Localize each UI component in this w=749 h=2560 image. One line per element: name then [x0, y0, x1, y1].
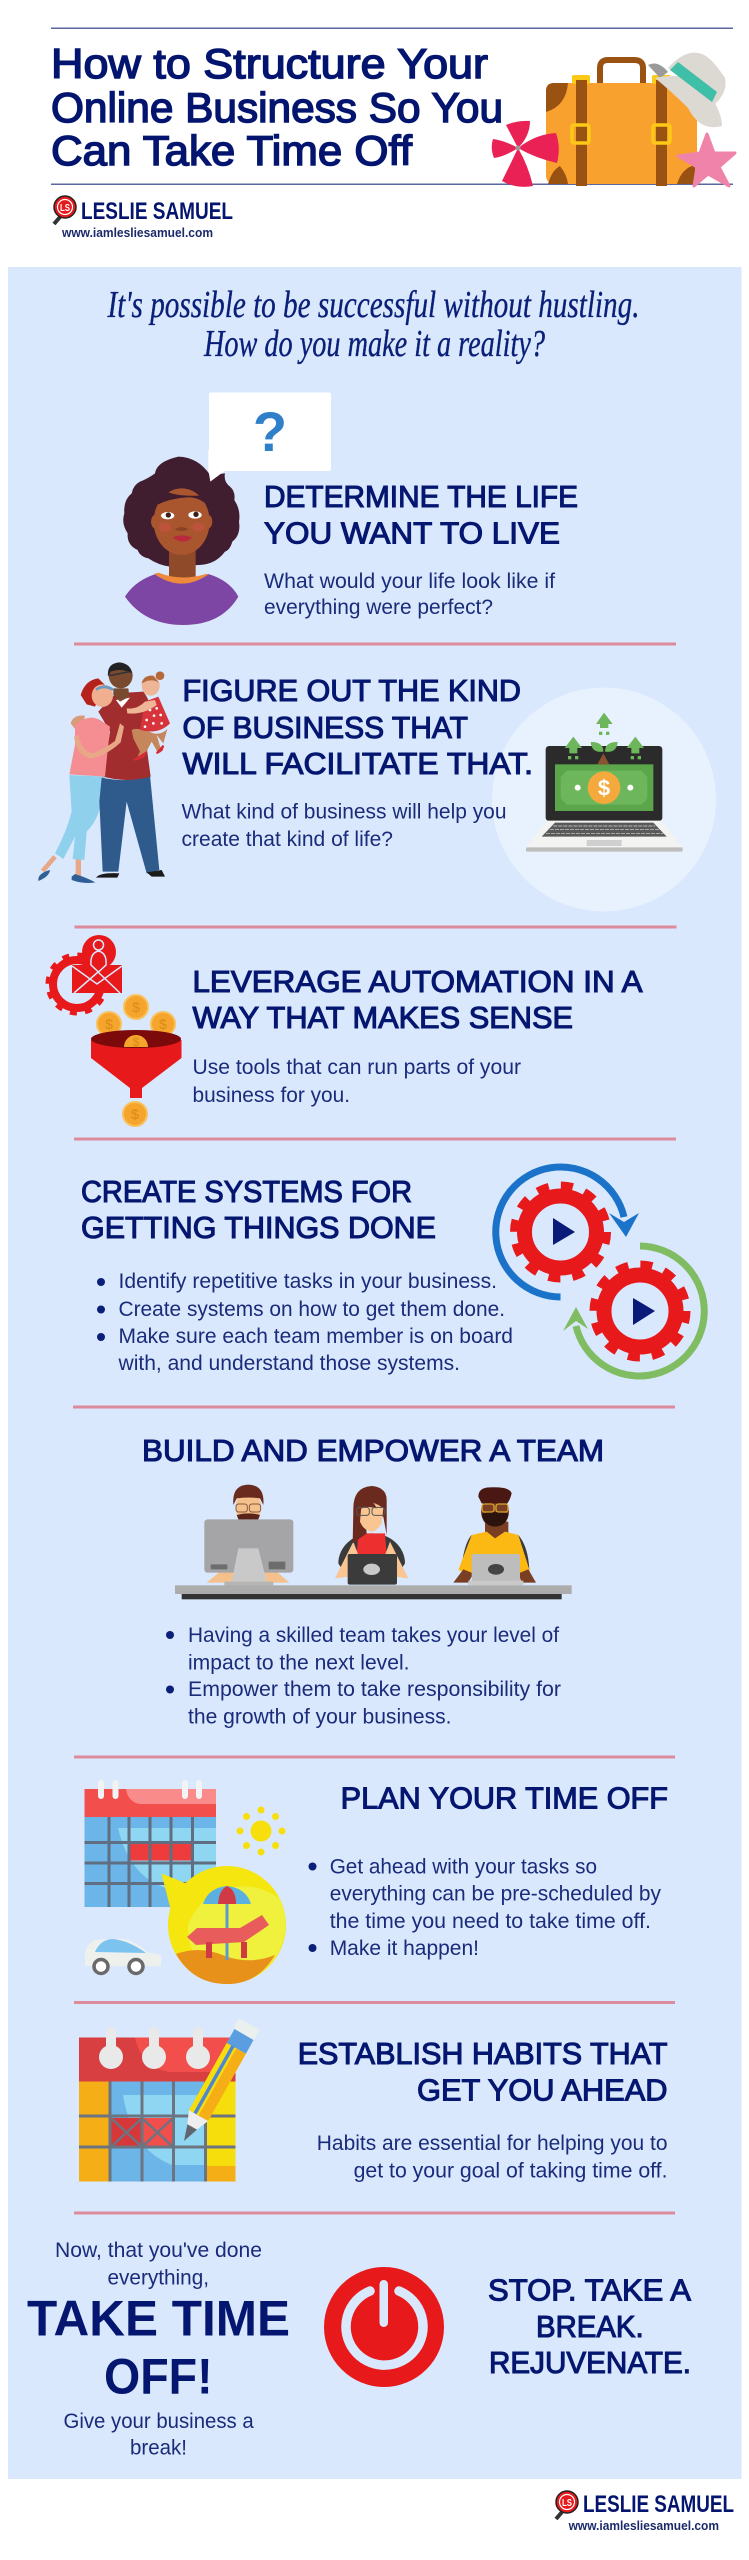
- pencil: [184, 2019, 260, 2141]
- icon: thinking woman: [123, 450, 250, 625]
- gear: [48, 955, 106, 1013]
- heading: figure out the business: FIGURE OUT THE KIND: [182, 674, 521, 708]
- text block: script tagline: [107, 284, 639, 365]
- logo: Leslie Samuel: LESLIE SAMUEL: [81, 198, 233, 225]
- text block: give your business a break: [64, 2409, 254, 2460]
- list: team bullets: the growth of your business.: [188, 1704, 452, 1728]
- heading: stop take a break: STOP. TAKE A: [488, 2274, 692, 2308]
- icon: laptop with money: $: [598, 776, 610, 801]
- heading: determine the life: [264, 480, 578, 550]
- text block: perfect life question: everything were perfect?: [264, 595, 493, 619]
- heading: establish habits: GET YOU AHEAD: [417, 2074, 668, 2108]
- icon: habit calendar and pencil: [79, 2019, 260, 2182]
- heading: establish habits: [298, 2037, 668, 2108]
- icon: automation funnel: [48, 935, 182, 1126]
- coins and funnel: $: [133, 1035, 140, 1049]
- text block: intro to take time off: Now, that you've done: [55, 2238, 262, 2262]
- text block: perfect life question: What would your life look like if: [264, 569, 555, 593]
- heading: leverage automation: [192, 965, 643, 1035]
- title: Can Take Time Off: [51, 127, 412, 174]
- list: systems bullets: [97, 1269, 513, 1375]
- heading: stop take a break: REJUVENATE.: [489, 2346, 691, 2380]
- text block: script tagline: How do you make it a reality?: [203, 323, 545, 365]
- heading: establish habits: ESTABLISH HABITS THAT: [298, 2037, 668, 2071]
- heading: figure out the business: OF BUSINESS THAT: [182, 711, 468, 745]
- list: systems bullets: with, and understand those systems.: [118, 1351, 460, 1375]
- text block: business question: [182, 800, 506, 851]
- list: time off bullets: [308, 1854, 661, 1960]
- icon: question speech bubble: ?: [253, 400, 287, 463]
- list: time off bullets: Get ahead with your tasks so: [330, 1854, 597, 1878]
- green arrow: [563, 1246, 704, 1376]
- heading: determine the life: YOU WANT TO LIVE: [264, 516, 560, 550]
- sun: [236, 1806, 286, 1856]
- list: time off bullets: everything can be pre-scheduled by: [330, 1882, 661, 1906]
- heading: create systems: CREATE SYSTEMS FOR: [81, 1175, 412, 1209]
- heading: take time off: OFF!: [104, 2349, 213, 2405]
- icon: suitcase, hat, beach ball and starfish: [492, 53, 735, 187]
- heading: create systems: [81, 1175, 436, 1245]
- list: systems bullets: Make sure each team member is on board: [118, 1324, 513, 1348]
- coins and funnel: [91, 995, 182, 1126]
- heading: take time off: [27, 2291, 290, 2405]
- text block: intro to take time off: [55, 2238, 262, 2290]
- coins and funnel: $: [131, 1106, 139, 1122]
- title: [51, 40, 503, 174]
- icon: power button: [324, 2267, 444, 2387]
- heading line: facilitate: WILL FACILITATE THAT.: [182, 747, 533, 781]
- heading: figure out the business: [182, 674, 521, 745]
- panel: pale circle behind laptop: [492, 688, 716, 912]
- person one: [204, 1485, 293, 1586]
- icon: calendar with beach break: [84, 1780, 286, 1984]
- calendar: [79, 2027, 236, 2182]
- heading: build a team: BUILD AND EMPOWER A TEAM: [142, 1434, 604, 1468]
- icon: team at desk: [175, 1485, 572, 1599]
- heading: create systems: GETTING THINGS DONE: [81, 1211, 436, 1245]
- list: team bullets: Empower them to take responsibility for: [188, 1677, 561, 1701]
- list: time off bullets: the time you need to take time off.: [330, 1909, 651, 1933]
- person two: [335, 1486, 408, 1585]
- list: systems bullets: Identify repetitive tasks in your business.: [118, 1269, 497, 1293]
- logo: footer Leslie Samuel: [556, 2491, 734, 2533]
- icon: family: [38, 662, 170, 883]
- envelope: [72, 965, 122, 993]
- gear one: [514, 1186, 606, 1278]
- heading: leverage automation: WAY THAT MAKES SENSE: [192, 1001, 573, 1035]
- logo: footer Leslie Samuel: www.iamlesliesamuel.com: [568, 2518, 719, 2533]
- logo: Leslie Samuel: [54, 196, 233, 240]
- car: [85, 1938, 161, 1974]
- heading: stop take a break: BREAK.: [536, 2310, 644, 2344]
- coins and funnel: $: [159, 1016, 167, 1032]
- logo: Leslie Samuel: www.iamlesliesamuel.com: [61, 225, 213, 240]
- person three: [453, 1487, 536, 1585]
- list: team bullets: [166, 1623, 561, 1728]
- text block: automation tools: business for you.: [192, 1083, 350, 1107]
- gear two: [594, 1265, 686, 1357]
- text block: give your business a break: break!: [130, 2436, 187, 2460]
- icon: question speech bubble: [209, 392, 331, 471]
- text block: automation tools: [192, 1055, 521, 1107]
- text block: automation tools: Use tools that can run parts of your: [192, 1055, 521, 1079]
- contact badge: [82, 935, 116, 972]
- text block: habits: get to your goal of taking time off.: [354, 2158, 668, 2182]
- heading: leverage automation: LEVERAGE AUTOMATION IN A: [192, 965, 643, 999]
- panel: header: [51, 28, 735, 240]
- calendar: [84, 1780, 216, 1907]
- blue arrow: [496, 1167, 639, 1297]
- logo: Leslie Samuel: LS: [60, 203, 70, 214]
- heading: determine the life: DETERMINE THE LIFE: [264, 480, 578, 514]
- text block: perfect life question: [264, 569, 555, 619]
- logo: footer Leslie Samuel: LS: [562, 2498, 572, 2509]
- heading: stop take a break: [488, 2274, 692, 2380]
- desk: [175, 1585, 572, 1599]
- title: How to Structure Your: [51, 40, 488, 87]
- coins and funnel: $: [132, 999, 140, 1015]
- list: team bullets: impact to the next level.: [188, 1650, 410, 1674]
- heading: plan time off: PLAN YOUR TIME OFF: [341, 1782, 668, 1816]
- icon: cycling gears: [496, 1167, 704, 1376]
- text block: intro to take time off: everything,: [108, 2266, 209, 2290]
- text block: give your business a break: Give your business a: [64, 2409, 254, 2433]
- list: team bullets: Having a skilled team takes your level of: [188, 1623, 559, 1647]
- list: systems bullets: Create systems on how to get them done.: [118, 1297, 505, 1321]
- list: time off bullets: Make it happen!: [330, 1936, 479, 1960]
- heading: take time off: TAKE TIME: [27, 2291, 290, 2347]
- text block: business question: create that kind of life?: [182, 827, 393, 851]
- icon: laptop with money: [526, 713, 683, 852]
- text block: business question: What kind of business will help you: [182, 800, 506, 824]
- text block: habits: Habits are essential for helping you to: [317, 2131, 668, 2155]
- title: Online Business So You: [51, 84, 503, 131]
- coins and funnel: $: [105, 1016, 113, 1032]
- text block: habits: [317, 2131, 668, 2182]
- beach bubble: [162, 1866, 286, 1984]
